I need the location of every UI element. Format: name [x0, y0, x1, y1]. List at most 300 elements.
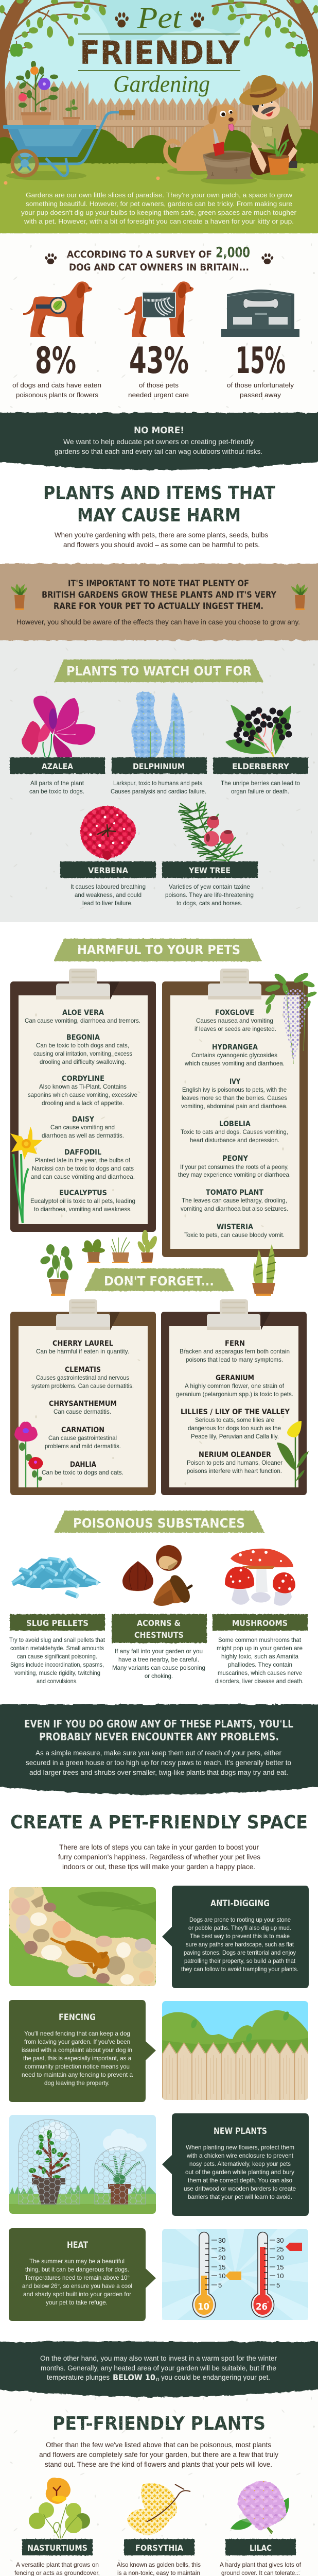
text: verbena	[70, 883, 146, 907]
text: acorns and chestnuts: have a tree nearby, be careful.	[118, 1656, 199, 1663]
text: slug pellets	[9, 1636, 105, 1685]
text: intro paragraph: with a pet. However, with a bit of foresight you can create a haven for your kitty or pup.	[24, 217, 294, 225]
label: delphinium	[112, 757, 207, 774]
text: verbena: It causes laboured breathing	[70, 883, 146, 890]
text: acorns and chestnuts: If any fall into your garden or you	[115, 1648, 203, 1655]
label: elderberry	[213, 757, 308, 774]
plant in big pot	[16, 61, 59, 112]
plant card: yew tree	[162, 802, 258, 907]
entries: CHRYSANTHEMUM	[49, 1400, 117, 1408]
entries: English ivy is poisonous to pets, with the	[182, 1086, 287, 1093]
entries: poisons interfere with heart function.	[187, 1467, 282, 1475]
illustration: forsythia	[127, 2483, 190, 2535]
entries: leaves more so than the berries. Causes	[182, 1094, 287, 1101]
icon: potted plant 4	[136, 1230, 158, 1263]
entries: Also known as Ti-Plant. Contains	[39, 1083, 127, 1090]
entries: CHERRY LAUREL	[52, 1340, 113, 1348]
plant card: elderberry	[213, 705, 308, 795]
entries: they may experience vomiting or diarrhoea.	[178, 1171, 291, 1178]
plant card: nasturtiums: NASTURTIUMS	[27, 2543, 87, 2553]
entries: DAISY	[72, 1115, 95, 1124]
text: no more body: gardens so that each and every tail can wag outdoors without risks.	[55, 448, 262, 455]
text: mushrooms	[215, 1636, 304, 1685]
text: slug pellets: and convulsions.	[37, 1677, 78, 1685]
text: yew tree	[165, 883, 254, 907]
text: harm intro	[55, 531, 268, 549]
heading: important note: RARE FOR YOUR PET TO ACTUALLY INGEST THEM.	[54, 601, 263, 612]
entries: Eucalyptol oil is toxic to all pets, leading	[30, 1197, 135, 1205]
panel: pet-friendly plants paper background	[0, 2385, 318, 2576]
heading: anti-digging: ANTI-DIGGING	[210, 1899, 270, 1909]
thermometer 10 degrees: 10	[218, 2272, 225, 2280]
stat: 15%	[227, 340, 294, 399]
entries: which causes vomiting and diarrhoea.	[184, 1060, 285, 1067]
text body: As a simple measure, make sure you keep them out of reach of your pets, either	[36, 1749, 281, 1757]
text: mushrooms: phalliodes. They contain	[228, 1661, 292, 1668]
caption 8%	[12, 381, 101, 399]
entries: and can cause vomiting and diarrhoea.	[31, 1173, 135, 1180]
text: new plants: use driftwood or wooden borders to create	[184, 2185, 296, 2192]
illustration: chicken wire plants	[9, 2115, 156, 2214]
clipboard: don't forget left	[10, 1299, 156, 1495]
entries: if leaves or seeds are ingested.	[195, 1025, 276, 1032]
text: slug pellets: contain metaldehyde. Small amounts	[10, 1645, 104, 1652]
text: heat: The summer sun may be a beautiful	[29, 2258, 125, 2265]
heading: important note: IT'S IMPORTANT TO NOTE THAT PLENTY OF	[68, 579, 249, 589]
dog	[166, 104, 237, 175]
entries: DAFFODIL	[64, 1148, 101, 1157]
caption 43%	[128, 381, 189, 399]
caption 43%: needed urgent care	[128, 391, 189, 399]
caption 15%: passed away	[240, 391, 281, 399]
entries: to diarrhoea, vomiting and weakness.	[34, 1206, 132, 1213]
text: new plants: with a chicken wire enclosure to prevent	[186, 2152, 294, 2159]
clip	[208, 969, 261, 999]
illustration: azalea	[22, 696, 95, 757]
text: intro paragraph: your pup doesn't dig up your bulbs to keeping them safe, green spaces are much tougher	[21, 209, 297, 216]
fence	[5, 81, 312, 155]
entries: system problems. Can cause dermatitis.	[31, 1382, 134, 1389]
title word: Gardening: Gardening	[113, 71, 210, 97]
text body	[26, 1749, 291, 1776]
text: azalea: can be toxic to dogs.	[29, 788, 84, 795]
banner: poisonous substances	[54, 1511, 264, 1533]
text: heat: and below 26°, so ensure you have a cool	[22, 2282, 132, 2290]
entries: vomiting, abdominal pain and diarrhoea.	[181, 1103, 288, 1110]
text: winter	[40, 2354, 277, 2383]
text: intro paragraph: Gardens are our own little slices of paradise. They're your own patch, a space to grow	[26, 191, 293, 199]
text: anti-digging: Dogs are prone to rooting up your stone	[189, 1916, 291, 1923]
thermometer 26 degrees: 5	[276, 2281, 280, 2289]
paper	[19, 995, 148, 1224]
thermometer 10 degrees: 5	[218, 2281, 222, 2289]
substance: slug pellets: SLUG PELLETS	[26, 1618, 89, 1628]
plant card: elderberry: ELDERBERRY	[232, 761, 289, 771]
entries: drooling and a lack of appetite.	[42, 1099, 124, 1107]
text: fencing: issued with a complaint about your dog in	[22, 2046, 132, 2054]
clip	[56, 969, 119, 999]
text: harm intro: and flowers you should avoid – as some can be harmful to pets.	[63, 540, 260, 549]
text: heat: Temperatures need to remain above 10°	[25, 2274, 130, 2281]
entries: Can cause dermatitis.	[54, 1408, 111, 1415]
text: pet-friendly intro	[39, 2441, 278, 2468]
text: heat: your pet to take refuge.	[46, 2299, 108, 2306]
survey heading	[67, 244, 250, 273]
entries: Peace lily, Peruvian and Calla lily.	[191, 1433, 279, 1440]
banner: don't forget: DON'T FORGET...	[104, 1274, 214, 1289]
entries	[31, 1340, 134, 1476]
banner: don't forget	[84, 1268, 234, 1291]
stat: 8%	[12, 340, 101, 399]
text: delphinium: Larkspur, toxic to humans and pets.	[113, 779, 204, 787]
heading: important note	[42, 579, 277, 612]
card: new plants	[162, 2113, 309, 2216]
text: fencing: the past, this is especially important, as a	[23, 2055, 131, 2062]
icon: potted plant 2	[82, 1238, 105, 1263]
text: fencing: community protection notice means you	[25, 2063, 130, 2070]
entries: LILLIES / LILY OF THE VALLEY	[181, 1408, 290, 1416]
entries: ALOE VERA	[62, 1009, 104, 1017]
text: acorns and chestnuts: or choking.	[145, 1672, 173, 1680]
entries: CARNATION	[61, 1426, 104, 1434]
text: anti-digging: or pebble paths. They'll also dig up mud.	[188, 1924, 291, 1931]
board	[161, 1312, 307, 1495]
text: pet-friendly intro: stand out. These are the kind of flowers and plants that your pets will love.	[45, 2460, 272, 2468]
label: slug pellets	[10, 1614, 105, 1631]
text: anti-digging: paving stones. Dogs are territorial and enjoy	[184, 1949, 296, 1956]
text: anti-digging: sure any paths are hardscape, such as flat	[186, 1941, 294, 1948]
illustration: elderberry	[225, 705, 292, 757]
entries: NERIUM OLEANDER	[199, 1451, 271, 1459]
text: harm intro: When you're gardening with pets, there are some plants, seeds, bulbs	[55, 531, 268, 539]
panel: important note	[0, 564, 318, 640]
entries: CLEMATIS	[65, 1366, 101, 1374]
text: nasturtiums	[13, 2561, 101, 2576]
entries: geranium (pelargonium spp.) is toxic to pets.	[176, 1391, 293, 1398]
thermometer 10 degrees: °	[208, 2301, 210, 2307]
wheelbarrow	[3, 110, 135, 180]
clip	[56, 1299, 120, 1330]
board	[162, 981, 308, 1257]
text: azalea	[29, 779, 84, 795]
caption 8%: poisonous plants or flowers	[16, 391, 99, 399]
text: winter: BELOW 10	[113, 2372, 155, 2382]
text: fencing: dog leaving the property.	[44, 2079, 110, 2087]
entries: Causes gastrointestinal and nervous	[36, 1374, 129, 1381]
label: verbena	[60, 861, 156, 878]
entries: dangerous for dogs too such as the	[188, 1425, 281, 1432]
text: pet-friendly intro: and flowers are completely safe for your garden, but there are a few that truly	[39, 2450, 278, 2459]
banner: plants to watch out for: PLANTS TO WATCH OUT FOR	[66, 664, 252, 679]
thermometer 26 degrees: 26	[256, 2301, 268, 2312]
label: lilac	[225, 2539, 296, 2555]
label: nasturtiums	[22, 2539, 93, 2555]
text: delphinium: Causes paralysis and cardiac failure.	[111, 788, 206, 795]
label: acorns and chestnuts	[112, 1614, 207, 1643]
stat: 43%: 43%	[129, 340, 189, 382]
text: elderberry	[221, 779, 300, 795]
entries: Can cause gastrointestinal	[48, 1434, 117, 1442]
entries: EUCALYPTUS	[59, 1189, 107, 1197]
text: anti-digging: patrolling their property, so build a path that	[184, 1957, 296, 1964]
entries: WISTERIA	[217, 1223, 253, 1231]
panel: survey statistics	[0, 233, 318, 414]
label: mushrooms	[213, 1614, 308, 1631]
survey heading: 2,000	[216, 244, 250, 261]
panel: grey paper section background	[0, 639, 318, 922]
thermometer 26 degrees: 30	[276, 2236, 284, 2244]
entries: The leaves can cause lethargy, drooling,	[182, 1197, 287, 1204]
text: intro paragraph	[21, 191, 297, 225]
text: mushrooms: highly toxic, such as Amanita	[221, 1653, 298, 1660]
plant card: verbena: VERBENA	[88, 866, 129, 875]
heading: heat: HEAT	[67, 2240, 88, 2250]
survey heading: DOG AND CAT OWNERS IN BRITAIN...	[69, 262, 249, 273]
substance: acorns and chestnuts: CHESTNUTS	[134, 1630, 184, 1640]
text: mushrooms: might pop up in your garden are	[217, 1645, 303, 1652]
plant card: azalea: AZALEA	[42, 761, 74, 771]
illustration: fence and hedge	[162, 2001, 308, 2100]
banner: plants to watch out for	[54, 659, 263, 682]
caption 15%	[227, 381, 294, 399]
thermometer 10 degrees: 10	[198, 2301, 209, 2312]
clip	[207, 1299, 271, 1330]
text: forsythia	[117, 2561, 201, 2576]
text: no more body: We want to help educate pet owners on creating pet-friendly	[63, 438, 254, 446]
ground	[0, 163, 318, 233]
thermometer 10 degrees: 15	[218, 2263, 225, 2271]
text: fencing: need to maintain any fencing to prevent a	[22, 2071, 133, 2078]
text: heat: thing, but it can be dangerous for dogs.	[25, 2266, 129, 2273]
text: azalea: All parts of the plant	[30, 779, 84, 787]
illustration: daffodil	[10, 1127, 42, 1223]
stat: 43%	[128, 340, 189, 399]
thermometer 26 degrees	[251, 2232, 302, 2317]
plant card: forsythia: FORSYTHIA	[135, 2543, 184, 2553]
caption 8%: of dogs and cats have eaten	[12, 381, 101, 389]
clipboard: don't forget right	[161, 1299, 309, 1495]
icon: potted plant 3	[111, 1238, 130, 1263]
banner: harmful to your pets	[54, 939, 262, 961]
text: forsythia: Also known as golden bells, this	[117, 2561, 201, 2568]
text: lilac	[215, 2561, 307, 2576]
illustration: nasturtiums	[29, 2478, 90, 2538]
entries: diarrhoea as well as dermatitis.	[42, 1132, 124, 1139]
text: elderberry: The unripe berries can lead to	[221, 779, 300, 787]
survey heading: ACCORDING TO A SURVEY OF	[67, 249, 212, 260]
entries: HYDRANGEA	[212, 1043, 258, 1052]
text: yew tree: Varieties of yew contain taxine	[169, 883, 250, 890]
label: forsythia	[124, 2539, 195, 2555]
decorative potted plants and don't forget banner	[39, 1230, 276, 1296]
thermometer 10 degrees	[192, 2232, 241, 2317]
entries: PEONY	[222, 1155, 249, 1163]
text: new plants: nosy pets. Alternatively, keep your pets	[189, 2160, 291, 2167]
label: azalea	[10, 757, 105, 774]
icon: potted plant tall	[39, 1244, 74, 1296]
orange bush flowers	[4, 161, 304, 184]
entries: drooling and difficulty swallowing.	[40, 1058, 126, 1065]
heading: PROBABLY NEVER ENCOUNTER ANY PROBLEMS.	[39, 1731, 279, 1743]
plant card: delphinium	[111, 691, 207, 795]
card: fencing	[9, 2000, 156, 2102]
thermometer 26 degrees: 10	[276, 2272, 284, 2280]
illustration: verbena	[80, 806, 136, 860]
substance: slug pellets	[9, 1556, 105, 1685]
text: intro paragraph: something beautiful. However, for pet owners, gardens can be tricky. From making sure	[26, 200, 292, 208]
board	[10, 981, 156, 1232]
entries: poisons that lead to many symptoms.	[186, 1356, 283, 1363]
entries: Toxic to cats and dogs. Causes vomiting,	[181, 1128, 288, 1136]
text: new plants: them at the correct depth. You can also	[188, 2177, 292, 2184]
text: anti-digging: The best way to prevent this is to make	[190, 1933, 290, 1940]
entries: Can be harmful if eaten in quantity.	[36, 1348, 129, 1355]
text: yew tree: to dogs, cats and horses.	[176, 900, 242, 907]
text: yew tree: poisons. They are life-threatening	[165, 891, 254, 899]
text body: add larger trees and shrubs over smaller, twig-like plants that dogs may try and eat.	[29, 1769, 288, 1776]
icon: gravestone	[221, 290, 299, 337]
entries: Narcissi can be toxic to dogs and cats	[32, 1165, 134, 1172]
text: winter: months. Generally, any heated area of your garden will be suitable, but if the	[41, 2364, 276, 2372]
entries: problems and mild dermatitis.	[45, 1443, 121, 1450]
card: anti-digging	[162, 1886, 309, 1988]
text: slug pellets: vomiting, muscle rigidity, twitching	[14, 1669, 100, 1676]
entries: Poison to pets and humans, Oleaner	[187, 1459, 282, 1466]
illustration: carnation and dahlia	[14, 1421, 43, 1487]
text: verbena: lead to liver failure.	[82, 900, 133, 907]
entries: heart disturbance and depression.	[190, 1137, 279, 1144]
plant card: forsythia	[117, 2483, 201, 2576]
icon: paws	[114, 12, 205, 27]
paper	[169, 1326, 298, 1487]
entries: CORDYLINE	[62, 1075, 104, 1083]
title rules	[78, 34, 240, 71]
gardener	[237, 75, 306, 180]
text: pet-friendly intro: Other than the few we've listed above that can be poisonous, most plants	[46, 2441, 271, 2449]
thermometer 26 degrees: 15	[276, 2263, 284, 2271]
illustration: thermometers	[162, 2229, 308, 2320]
entries: causing oral irritation, vomiting, excess	[33, 1050, 132, 1057]
sack and trowel	[201, 129, 257, 184]
entries: FERN	[225, 1340, 245, 1348]
icon: heading paws	[44, 253, 274, 264]
heading	[24, 1718, 293, 1743]
panel: even if you do grow band	[0, 1704, 318, 1794]
thermometer 10 degrees: 25	[218, 2245, 225, 2253]
text: delphinium	[111, 779, 206, 795]
label: yew tree	[162, 861, 258, 878]
entries	[25, 1009, 140, 1213]
illustration: slug pellets	[11, 1556, 101, 1599]
plant card: nasturtiums	[13, 2478, 101, 2576]
text: anti-digging	[181, 1916, 298, 1973]
entries: IVY	[229, 1078, 241, 1086]
plant card: verbena	[60, 806, 156, 907]
illustration: yew tree	[179, 802, 243, 862]
title word: Friendly: FRIENDLY	[80, 34, 240, 72]
entries: Can be toxic to dogs and cats.	[42, 1469, 123, 1476]
illustration: lilac	[231, 2481, 289, 2534]
entries: saponins which cause vomiting, excessive	[28, 1091, 137, 1098]
text: no more body	[55, 438, 262, 455]
panel: no more band	[0, 413, 318, 470]
thermometer 10 degrees: 30	[218, 2236, 225, 2244]
text: heat: and shady spot built into your garden for	[23, 2291, 131, 2298]
illustration: calla lily	[277, 1421, 309, 1487]
clipboard: harmful right	[162, 969, 317, 1257]
heading: new plants: NEW PLANTS	[214, 2126, 267, 2137]
text: slug pellets: Try to avoid slug and snail pellets that	[9, 1636, 105, 1643]
entries: Bracken and asparagus fern both contain	[180, 1348, 290, 1355]
banner: poisonous substances: POISONOUS SUBSTANCES	[73, 1516, 245, 1531]
entries: GERANIUM	[216, 1374, 254, 1382]
text: new plants: When planting new flowers, protect them	[186, 2144, 294, 2151]
entries: Toxic to pets, can cause bloody vomit.	[184, 1231, 285, 1239]
text: mushrooms: disorders, liver disease and death.	[215, 1677, 304, 1685]
text: create intro: There are lots of steps you can take in your garden to boost your	[59, 1843, 259, 1851]
entries: DAHLIA	[70, 1461, 96, 1469]
entries: Planted late in the year, the bulbs of	[35, 1157, 131, 1164]
text: heat	[22, 2258, 132, 2306]
illustration: acorns and chestnuts	[122, 1545, 191, 1606]
heading: plants and items	[43, 483, 275, 526]
text: fencing	[22, 2030, 133, 2087]
text: create intro: indoors or out, these tips will make your garden a happy place.	[62, 1862, 255, 1871]
text: slug pellets: can cause significant poisoning.	[17, 1653, 97, 1660]
text: important note body: However, you should be aware of the effects they can have in case you choose to grow any.	[16, 618, 300, 626]
icon: right succulent	[291, 584, 308, 610]
thermometer 26 degrees: °	[267, 2301, 269, 2307]
caption 15%: of those unfortunately	[227, 381, 294, 389]
illustration: dog on stone path	[9, 1886, 156, 1986]
illustration: mushrooms	[225, 1549, 295, 1606]
icon: left succulent	[11, 584, 27, 610]
text: slug pellets: Signs include incoordination, spasms,	[10, 1661, 104, 1668]
paper	[170, 995, 299, 1249]
plant card: lilac: LILAC	[250, 2543, 272, 2553]
entries	[178, 1009, 291, 1239]
entries: Contains cyanogenic glycosides	[191, 1052, 277, 1059]
text: winter: o	[156, 2376, 160, 2383]
text: acorns and chestnuts	[112, 1648, 205, 1680]
text: fencing: from leaving your garden. If you've been	[24, 2038, 130, 2045]
substance: acorns and chestnuts: ACORNS &	[137, 1618, 181, 1628]
text: new plants: barriers that your pet will learn to avoid.	[188, 2193, 292, 2200]
panel: hero garden scene	[0, 0, 318, 233]
board	[10, 1312, 156, 1495]
heading: no more: NO MORE!	[134, 425, 184, 436]
entries: Serious to cats, some lilies are	[195, 1416, 274, 1423]
text: new plants: out of the garden while planting and bury	[185, 2168, 294, 2176]
entries: Can cause vomiting and	[50, 1124, 115, 1131]
icon: dog with x-ray	[125, 281, 193, 337]
plant card: lilac	[215, 2481, 307, 2576]
text: nasturtiums: A versatile plant that grows on	[16, 2561, 99, 2568]
heading: plants and items: PLANTS AND ITEMS THAT	[43, 483, 275, 504]
entries: FOXGLOVE	[215, 1009, 254, 1017]
thermometer 10 degrees: 20	[218, 2254, 225, 2262]
text: new plants	[184, 2144, 296, 2200]
paper	[19, 1326, 148, 1487]
heading: important note: BRITISH GARDENS GROW THESE PLANTS AND IT'S VERY	[42, 590, 277, 600]
icon: dog with magnifier	[23, 281, 92, 337]
substance: mushrooms	[213, 1549, 308, 1685]
text: mushrooms: Some common mushrooms that	[218, 1636, 302, 1643]
clipboard: harmful left	[10, 969, 156, 1232]
entries: If your pet consumes the roots of a peony,	[180, 1163, 289, 1171]
trees	[0, 0, 318, 142]
text: fencing: You'll need fencing that can keep a dog	[24, 2030, 130, 2037]
